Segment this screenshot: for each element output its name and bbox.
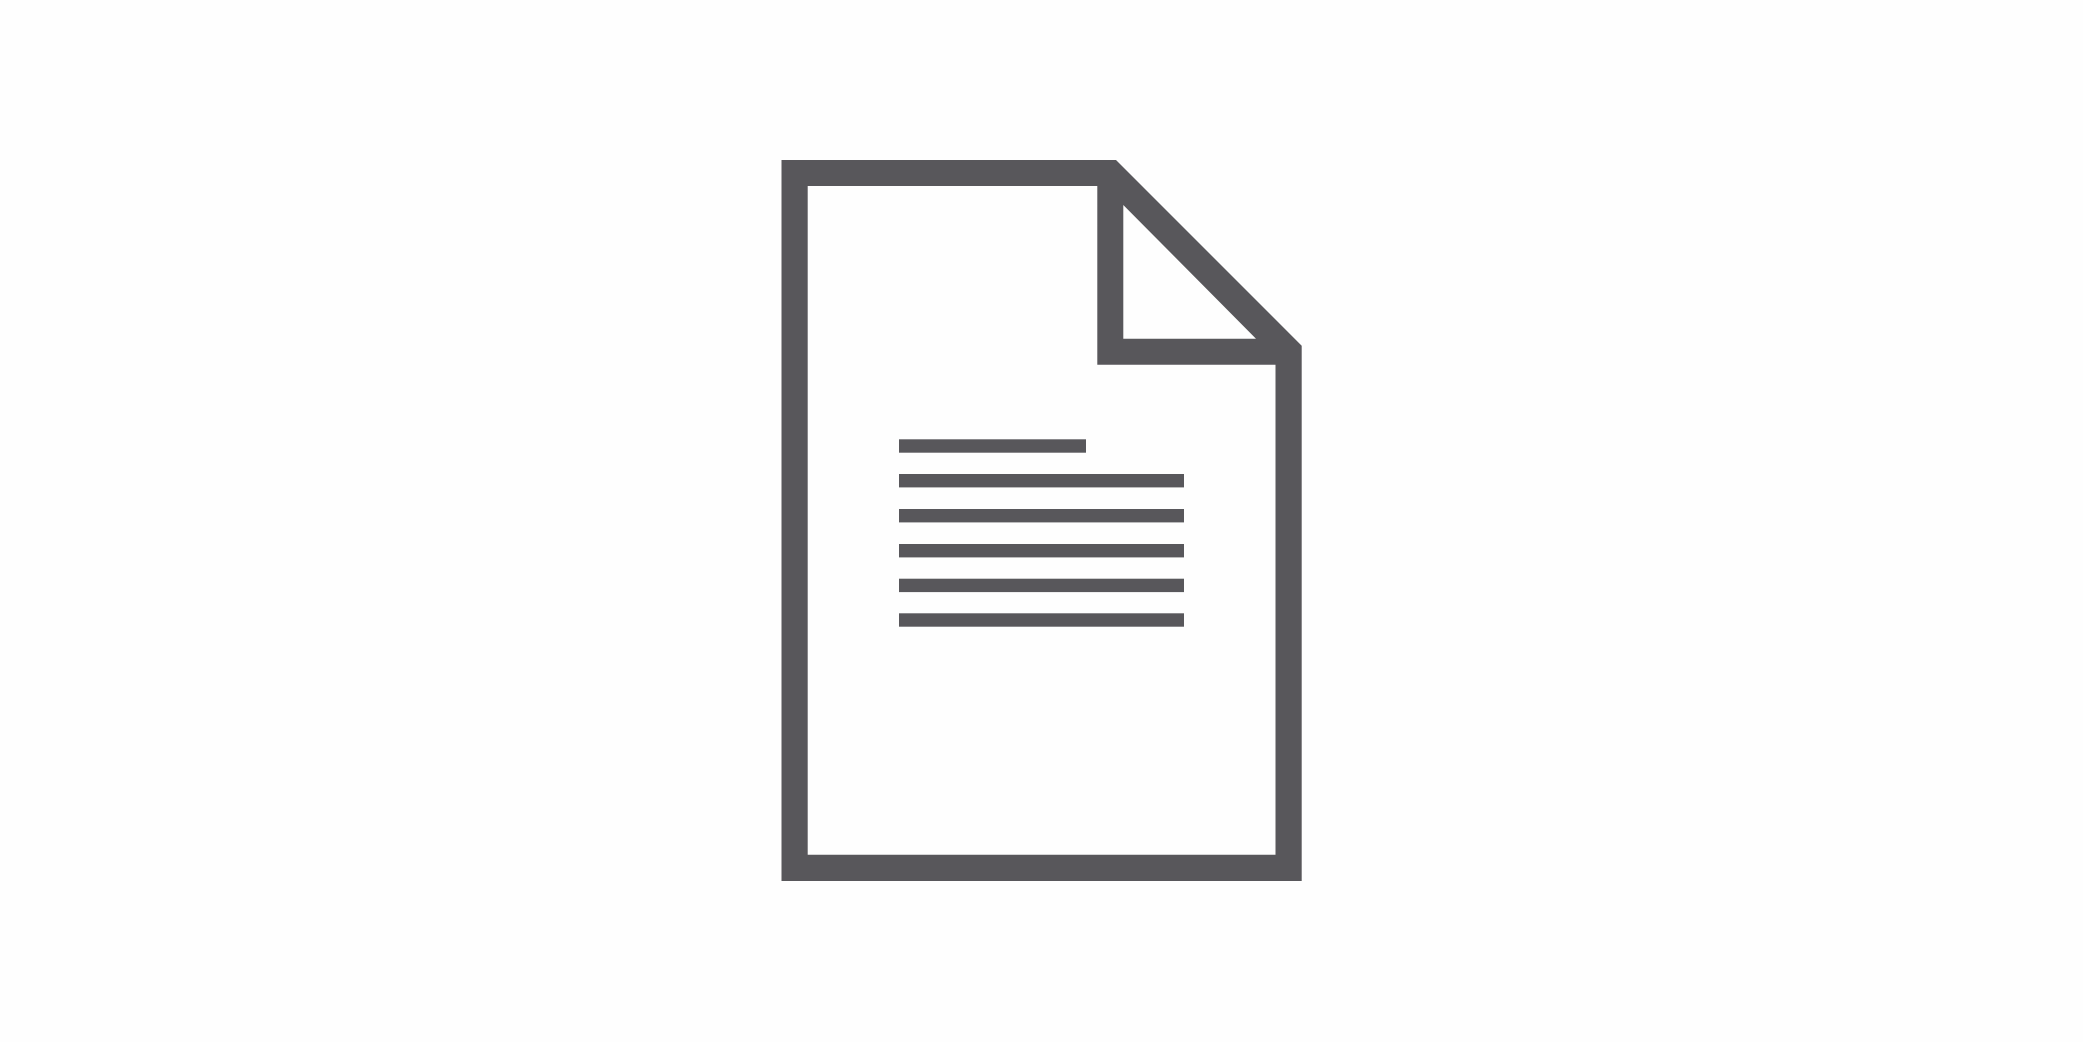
text lines xyxy=(899,439,1184,627)
icon: document page xyxy=(782,160,1302,881)
page outline with folded corner xyxy=(782,160,1302,881)
